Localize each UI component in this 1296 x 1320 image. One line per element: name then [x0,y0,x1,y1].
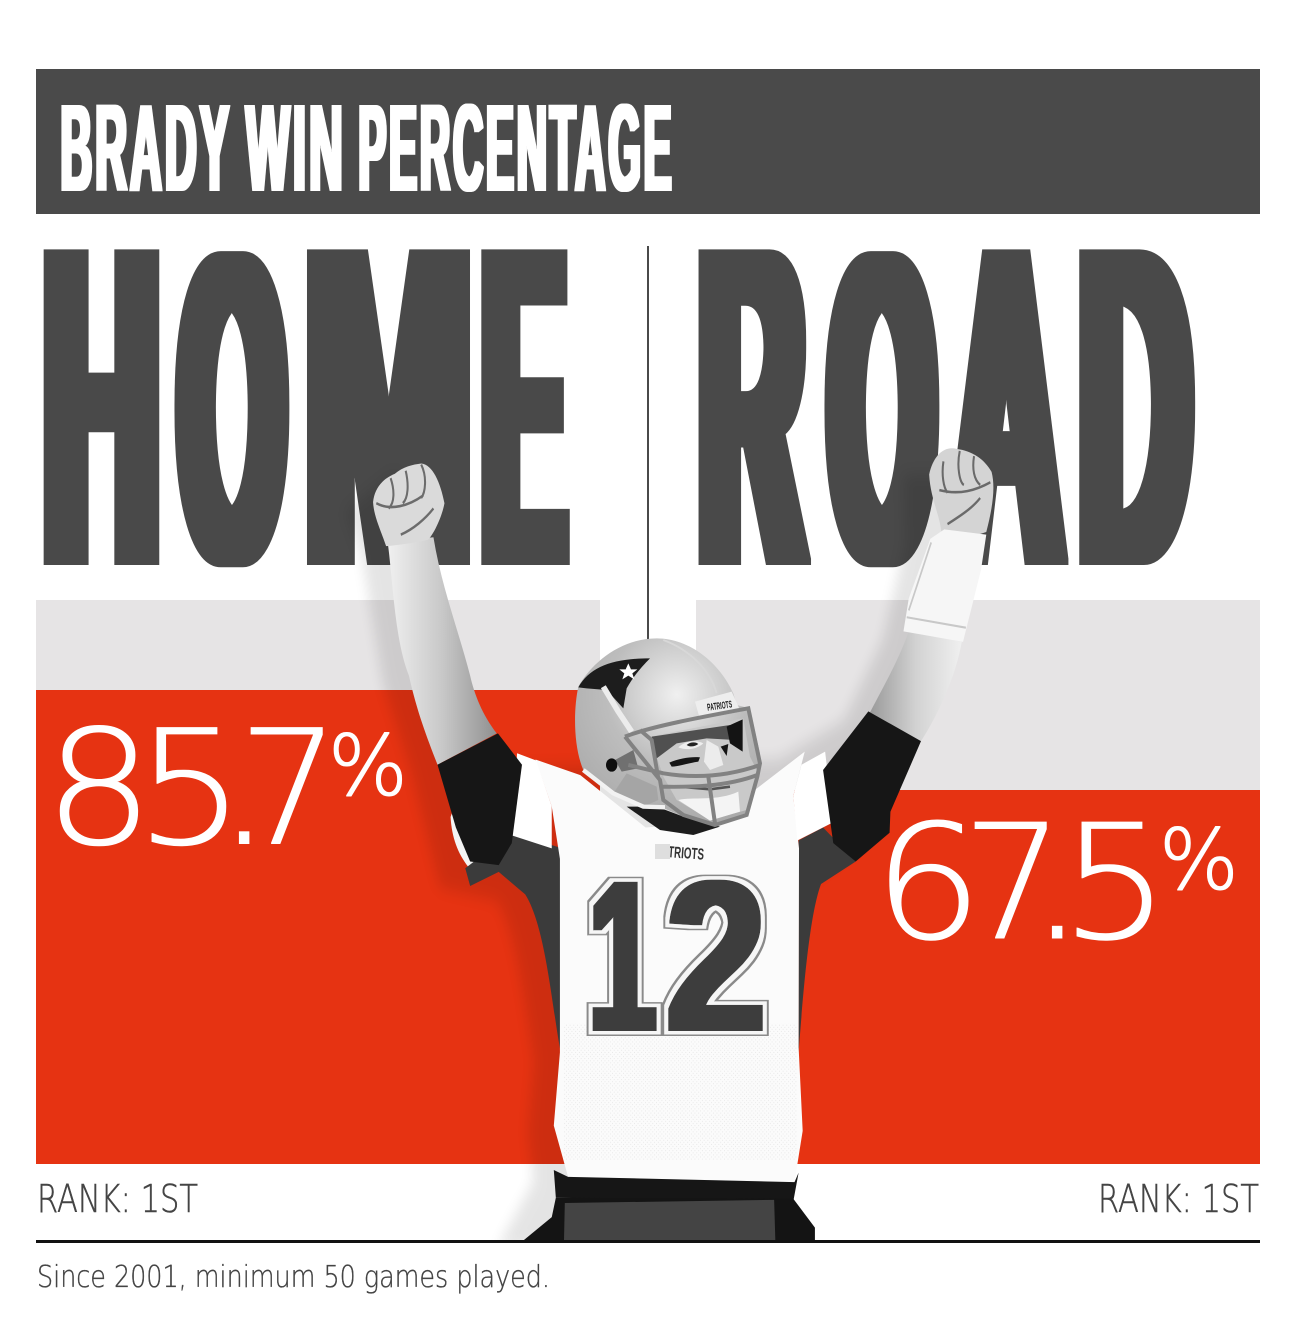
center divider [647,246,649,646]
value: home [44,668,408,888]
rank: home: RANK: 1ST [37,1177,198,1221]
right fist [929,448,993,536]
player shadow [346,472,966,1249]
value: road: . [1027,762,1087,983]
title text: BRADY [60,80,232,218]
bumper text: PATRIOTS [707,699,733,714]
footnote: Since 2001, minimum 50 games played. [37,1260,550,1295]
ear hole [606,758,617,772]
belt and pants [523,1170,815,1241]
bar: home [36,600,600,1164]
value: home: % [328,717,408,815]
baseline rule [36,1240,1260,1243]
left fist [373,463,444,546]
facemask [625,708,760,825]
neck shadow [627,807,720,835]
right sleeve [823,711,921,861]
heading: home: M [304,156,472,658]
far side helmet gap [727,719,743,752]
helmet logo [578,658,650,708]
helmet seam [663,640,717,693]
jersey wordmark: PATRIOTS [655,843,705,864]
bar: road [696,600,1260,1164]
heading: road: R [700,156,803,658]
value: home: 5 [135,696,245,882]
value: road [873,762,1239,983]
heading: home: H [44,156,159,658]
logo stripe [603,687,632,732]
jaw pad [613,773,658,807]
title banner [36,69,1260,218]
eye black right [721,744,728,756]
under-sleeve and side panels [451,796,495,867]
value: home: . [214,668,274,888]
left arm [388,537,497,765]
jersey number: 1 [589,837,656,1076]
jersey wordmark [655,843,705,864]
right arm [870,631,962,741]
helmet shell [575,638,760,827]
left sleeve [438,733,522,865]
heading: home: O [180,163,284,653]
chin strap [678,792,740,821]
helmet [575,638,760,835]
wordmark fade patch [655,844,670,859]
jersey mesh [564,1024,797,1160]
value: home: 7 [238,696,340,882]
mouth [680,787,730,789]
right sleeve stripe [793,752,833,841]
heading: road: O [830,163,934,653]
value: road: 5 [1060,791,1170,976]
front bumper [695,692,741,719]
rank: road: RANK: 1ST [1098,1177,1259,1221]
left sleeve stripe [512,753,552,848]
title banner: PERCENTAGE [358,80,674,218]
helmet trim [583,770,665,807]
title text: WIN [246,80,346,218]
value: road: % [1159,811,1239,909]
value: road: 6 [873,791,983,976]
text: E [484,156,563,658]
nose highlight [704,740,723,770]
eye [678,741,703,749]
right wristband [903,529,986,642]
jersey number: 2 [666,837,766,1076]
player photo illustration [373,448,993,1241]
heading: road: A [951,156,1062,658]
forehead shadow [652,725,735,758]
ear hardware [615,750,638,772]
logo star [619,663,637,679]
torso jersey [535,752,805,1182]
value: road: 7 [962,791,1064,976]
value: home: 8 [44,696,154,882]
eye black left [669,757,700,767]
face [650,718,757,820]
